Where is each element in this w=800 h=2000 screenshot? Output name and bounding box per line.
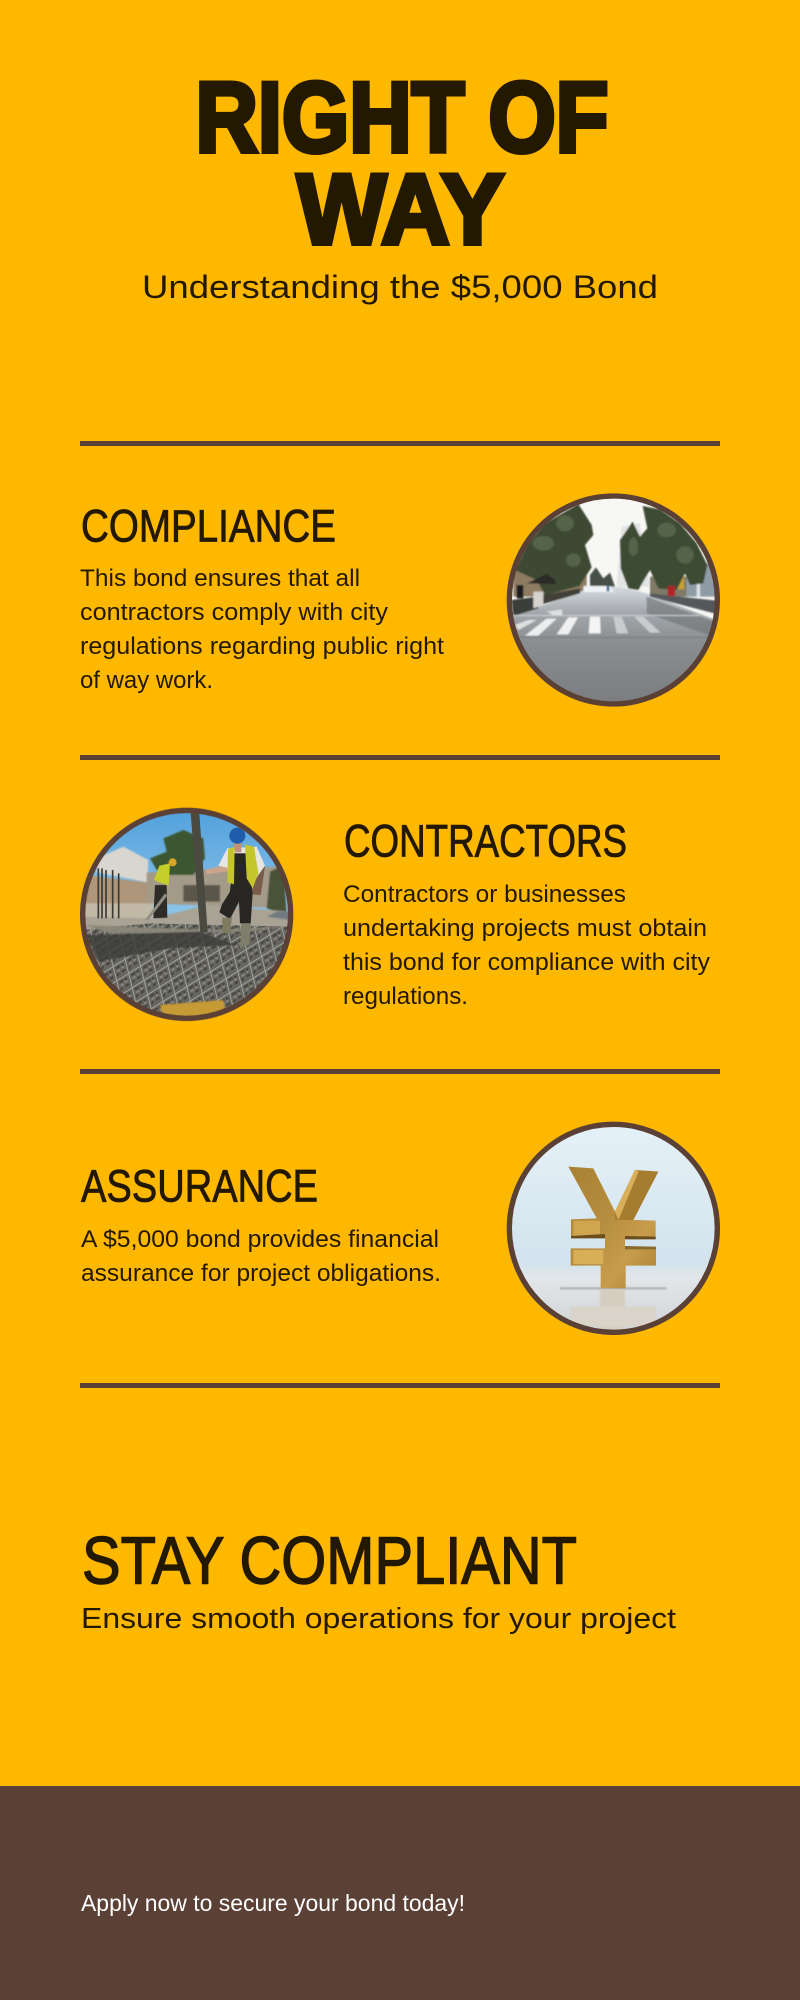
footer call to action: Apply now to secure your bond today! xyxy=(81,1890,465,1916)
text block: compliance xyxy=(80,565,444,694)
text block: assurance xyxy=(81,1226,441,1287)
panel: assurance xyxy=(81,1120,723,1340)
text block: assurance: A $5,000 bond provides financial xyxy=(81,1226,439,1253)
text block: compliance: This bond ensures that all xyxy=(80,565,360,592)
heading: compliance: COMPLIANCE xyxy=(81,500,336,552)
title: WAY xyxy=(297,154,504,264)
text block: contractors xyxy=(343,881,710,1010)
right worker xyxy=(205,828,265,948)
subheading: Ensure smooth operations for your project xyxy=(81,1603,676,1635)
footer band xyxy=(0,1786,800,2000)
subtitle: Understanding the $5,000 Bond xyxy=(142,269,658,305)
text block: contractors: Contractors or businesses xyxy=(343,881,626,908)
photo: workers pouring concrete xyxy=(77,805,297,1025)
closing message xyxy=(81,1524,676,1635)
heading: stay compliant: STAY COMPLIANT xyxy=(82,1524,577,1598)
heading: assurance: ASSURANCE xyxy=(81,1160,318,1212)
title: RIGHT OF xyxy=(196,62,608,172)
text block: assurance: assurance for project obligations. xyxy=(81,1260,441,1287)
heading: contractors: CONTRACTORS xyxy=(344,816,627,866)
panel: compliance xyxy=(80,490,723,710)
photo: empty city street xyxy=(503,490,723,710)
panel: contractors xyxy=(77,805,710,1025)
text block: contractors: regulations. xyxy=(343,983,468,1010)
text block: compliance: of way work. xyxy=(80,667,213,694)
text block: contractors: undertaking projects must obtain xyxy=(343,915,707,942)
title xyxy=(196,62,608,264)
text block: contractors: this bond for compliance with city xyxy=(343,949,710,976)
text block: compliance: contractors comply with city xyxy=(80,599,388,626)
photo: gold yen symbol xyxy=(503,1120,723,1340)
text block: compliance: regulations regarding public right xyxy=(80,633,444,660)
left worker xyxy=(145,858,177,920)
